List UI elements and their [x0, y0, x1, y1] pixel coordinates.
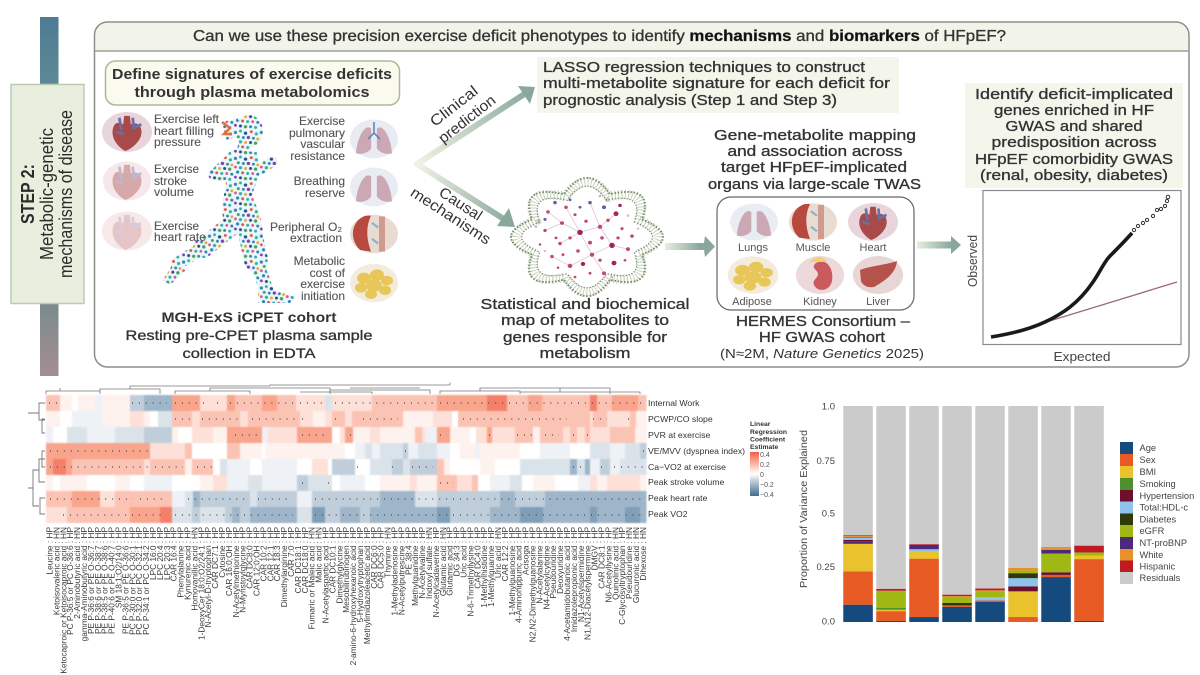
- text block: identify genes: genes enriched in HF: [994, 103, 1154, 119]
- heatmap column labels: N-6-Trimethyllysine : HP: [465, 527, 475, 617]
- heatmap column dendrogram: [46, 382, 640, 394]
- heatmap column labels: CAR 16:4 : HP: [169, 527, 179, 581]
- heatmap column labels: N-Acetylvaline : HP: [417, 527, 427, 598]
- heatmap column labels: CAR DC18:0 : HP: [300, 527, 310, 593]
- heatmap column labels: PE P-36:5 or PE O-36:6 : HP: [120, 527, 130, 634]
- text: gene-metabolite mapping: target HFpEF-implicated: [721, 160, 907, 176]
- heatmap column labels: LPC 20:4 : HP: [155, 527, 165, 580]
- left deficit labels: pressure: [154, 135, 201, 149]
- bar chart legend: [1120, 442, 1194, 584]
- heatmap column labels: CAR DC18:1 : HP: [293, 527, 303, 593]
- cohort caption: collection in EDTA: [182, 345, 316, 361]
- heatmap column labels: CAR DC10:1 : HP: [327, 527, 337, 593]
- step label panel: STEP 2:: [18, 164, 38, 224]
- heatmap column labels: N2,N2-Dimethylguanosine : HP: [528, 527, 538, 642]
- bar chart: y axis ticks: [816, 402, 835, 628]
- heatmap column labels: Leucine : HP: [44, 527, 54, 575]
- icon: heart stroke volume: [103, 162, 151, 200]
- heatmap colour legend: −0.2: [760, 482, 774, 489]
- QQ plot: Observed: [965, 235, 980, 287]
- heatmap row labels: Peak VO2: [648, 509, 688, 519]
- heatmap column labels: Homovanillic acid : HN: [189, 527, 199, 610]
- panel: target organs: Liver: [866, 296, 890, 308]
- heatmap column labels: Thymine : HN: [383, 527, 393, 578]
- icon: heart filling pressure: [102, 112, 152, 152]
- text: gene-metabolite mapping: organs via large-scale TWAS: [708, 177, 921, 193]
- heatmap column labels: 5-Hydroxytryptophan : HP: [355, 527, 365, 622]
- right deficit labels: resistance: [290, 149, 345, 163]
- heatmap column labels: C-Glycosyltryptophan : HP: [617, 527, 627, 625]
- heatmap column labels: CAR DC8:1 : HP: [596, 527, 606, 589]
- panel: target organs: Kidney: [803, 296, 837, 308]
- panel: target organs: Heart: [860, 242, 886, 254]
- heatmap column labels: Pseudouridine : HP: [548, 527, 558, 598]
- metabolite gene network: [511, 178, 663, 296]
- heatmap column labels: CAR DC5:0 : HP: [376, 527, 386, 589]
- bar chart legend: Hispanic: [1140, 562, 1176, 572]
- text block: identify genes: Identify deficit-implicated: [975, 87, 1173, 103]
- heatmap column labels: N6-Acetyllysine : HP: [603, 527, 613, 603]
- left deficit labels: Exercise left: [154, 112, 220, 126]
- stacked bar chart: [843, 406, 1104, 622]
- heatmap column labels: PC P-36:5 or PC O-36:6 : HP: [65, 527, 75, 635]
- heatmap column labels: Quinolinic acid : HN: [610, 527, 620, 600]
- heatmap column labels: CAR 12:1 : HP: [265, 527, 275, 581]
- heatmap column labels: CAR 18:3 : HP: [272, 527, 282, 581]
- heatmap column labels: CAR DC7:1 : HP: [210, 527, 220, 589]
- heatmap column labels: Kynurenic acid : HP: [182, 527, 192, 600]
- heatmap column labels: SM 18:1;O2/14:0 : HP: [114, 527, 124, 608]
- left deficit labels: stroke: [154, 174, 187, 188]
- heatmap column labels: 2-Aminobutyric acid : HN: [72, 527, 82, 619]
- LASSO text block: LASSO regression techniques to construct: [543, 60, 865, 76]
- callout: define signatures: through plasma metabolomics: [134, 85, 370, 101]
- LASSO text block: multi-metabolite signature for each deficit for: [543, 76, 890, 92]
- bar chart legend: Smoking: [1140, 479, 1176, 489]
- LASSO text block: [537, 57, 899, 113]
- heatmap column labels: PE P-38:5 or PE O-38:6 : HP: [100, 527, 110, 634]
- heatmap column labels: Glutamic acid : HP: [445, 527, 455, 596]
- heatmap column labels: 2-amino-6-hydroxyhexanoic acid : HP: [348, 527, 358, 665]
- heatmap column labels: N-Myristoylglycine : HP: [238, 527, 248, 613]
- heatmap row labels: [648, 398, 745, 519]
- heatmap column labels: DG 34:3 : HP: [452, 527, 462, 576]
- bar chart legend: Hypertension: [1140, 491, 1194, 501]
- heatmap row labels: Ca−VO2 at exercise: [648, 462, 726, 472]
- heatmap column labels: Dihexose : HN: [638, 527, 648, 580]
- heatmap column labels: N4-Acetylcytidine : HP: [541, 527, 551, 610]
- left deficit labels: Exercise: [154, 219, 199, 233]
- heatmap column labels: DMGV : HP: [590, 527, 600, 570]
- callout: define signatures: [106, 61, 400, 105]
- heatmap column labels: N-Acetylmethionine : HP: [231, 527, 241, 617]
- heatmap column labels: Mesobilirubinogen : HP: [341, 527, 351, 613]
- heatmap column labels: LPC 16:0 : HP: [148, 527, 158, 580]
- text block: identify genes: [965, 83, 1183, 188]
- heatmap row labels: VE/MVV (dyspnea index): [648, 446, 745, 456]
- left deficit labels: [154, 112, 220, 244]
- text: HERMES consortium: (N≈2M, Nature Genetics 2025): [720, 346, 924, 361]
- arrow: causal mechanisms: [417, 164, 515, 227]
- heatmap column labels: CAR DC4:0 : HP: [472, 527, 482, 589]
- text: statistical map: metabolism: [540, 346, 630, 362]
- heatmap row dendrogram: [28, 403, 45, 514]
- bar chart legend: Diabetes: [1140, 514, 1177, 524]
- bar chart: y axis ticks: 1.0: [822, 402, 835, 412]
- heatmap column labels: Fumaric or Maleic acid : HN: [307, 527, 317, 629]
- heatmap column labels: PC P-30:0 or PC O-30:1 : HP: [127, 527, 137, 635]
- text: statistical map: genes responsible for: [503, 330, 667, 346]
- heatmap column labels: Imidazolepropionic acid : HP: [569, 527, 579, 632]
- text: gene-metabolite mapping: and association across: [728, 144, 902, 160]
- right deficit labels: Breathing: [294, 174, 345, 188]
- right deficit labels: exercise: [300, 277, 345, 291]
- heatmap column labels: Methylimidazoleacetic acid : HP: [362, 527, 372, 644]
- bar chart: y axis ticks: 0.75: [816, 456, 835, 467]
- cohort caption: [126, 309, 373, 361]
- heatmap column labels: Malic acid : HN: [314, 527, 324, 583]
- heatmap column labels: N-Acetylcadaverine : HP: [431, 527, 441, 617]
- panel: target organs: [717, 197, 914, 310]
- right deficit labels: [270, 114, 346, 303]
- heatmap column labels: PE P-40:6 or PE O-40:7 : HP: [107, 527, 117, 634]
- cohort caption: Resting pre-CPET plasma sample: [126, 327, 373, 343]
- arrow: network to organs: [665, 236, 715, 257]
- heatmap column labels: N1-Acetylspermidine : HP: [576, 527, 586, 622]
- text block: identify genes: GWAS and shared: [1006, 119, 1142, 135]
- panel: target organs: Adipose: [732, 296, 772, 308]
- right deficit labels: Exercise: [299, 114, 345, 128]
- text: HERMES consortium: HERMES Consortium –: [736, 314, 911, 330]
- heatmap column labels: PC P-34:1 or PC O-34:2 : HP: [141, 527, 151, 635]
- label: clinical prediction: Clinical: [427, 83, 482, 130]
- heatmap column labels: 1-Methylguanine : HP: [486, 527, 496, 607]
- heatmap column labels: N1,N12-Diacetylspermine : HP: [583, 527, 593, 640]
- left deficit labels: volume: [154, 185, 194, 199]
- right deficit labels: initiation: [301, 289, 345, 303]
- text: statistical map: Statistical and biochemical: [480, 297, 690, 313]
- panel: target organs: Muscle: [796, 242, 830, 254]
- heatmap colour legend: −0.4: [760, 492, 774, 499]
- heatmap colour legend: 0.2: [760, 462, 770, 469]
- main panel: [94, 22, 1189, 367]
- bar chart: y axis ticks: 0.0: [822, 616, 835, 628]
- text: statistical map: [480, 297, 690, 362]
- bar chart: y axis ticks: 0.5: [822, 508, 835, 520]
- heatmap column labels: PE 38:4 : HP: [403, 527, 413, 575]
- text: statistical map: map of metabolites to: [501, 313, 669, 329]
- right deficit labels: vascular: [300, 137, 345, 151]
- heatmap column labels: LPC 20:3 : HP: [162, 527, 172, 580]
- heatmap column labels: 1-DeoxyCer 18:0;O2/24:1 : HP: [196, 527, 206, 640]
- bar chart: y axis title: Proportion of Variance Explained: [798, 430, 810, 588]
- heatmap column labels: PE P-36:6 or PE O-36:7 : HP: [86, 527, 96, 634]
- bar chart: y axis ticks: 0.25: [816, 562, 835, 573]
- right deficit labels: extraction: [290, 231, 342, 245]
- heatmap column labels: [44, 527, 648, 674]
- icon: adipose metabolic cost: [350, 264, 398, 302]
- right deficit labels: Peripheral O₂: [270, 220, 342, 234]
- heatmap column labels: N-Acetylalanine : HP: [534, 527, 544, 604]
- bar chart legend: NT-proBNP: [1140, 538, 1187, 548]
- label: causal mechanisms: mechanisms: [407, 184, 494, 248]
- bar chart legend: eGFR: [1140, 526, 1165, 536]
- heatmap column labels: Pseudouridine : HN: [624, 527, 634, 599]
- heatmap column labels: Acisoga : HP: [521, 527, 531, 575]
- right deficit labels: pulmonary: [289, 126, 345, 140]
- heatmap column labels: 1-Methylguanosine : HP: [507, 527, 517, 616]
- step label panel: mechanisms of disease: [56, 110, 76, 278]
- heatmap colour legend: Regression: [750, 429, 787, 436]
- QQ plot: Expected: [1054, 349, 1110, 364]
- bar chart legend: White: [1140, 550, 1163, 560]
- heatmap column labels: Ketocaproic or Ketoisocaproic acid : HN: [58, 527, 68, 674]
- bar chart legend: Sex: [1140, 455, 1156, 465]
- left deficit labels: Exercise: [154, 162, 199, 176]
- text: gene-metabolite mapping: [708, 128, 921, 193]
- heatmap column labels: gamma-Aminobutyric acid : HP: [79, 527, 89, 641]
- heatmap colour legend: 0.4: [760, 452, 770, 459]
- text: gene-metabolite mapping: Gene-metabolite mapping: [714, 128, 916, 144]
- heatmap column labels: N-Acetylputrescine : HP: [396, 527, 406, 615]
- text: HERMES consortium: HF GWAS cohort: [759, 330, 885, 346]
- LASSO text block: prognostic analysis (Step 1 and Step 3): [543, 93, 837, 109]
- heatmap column labels: CAR 16:0;OH : HP: [224, 527, 234, 596]
- heatmap column labels: Deoxyuridine : HP: [555, 527, 565, 594]
- right deficit labels: Metabolic: [294, 254, 345, 268]
- heatmap column labels: 4-Aminohippuric acid : HP: [514, 527, 524, 623]
- heatmap column labels: CAR 10:2 : HP: [258, 527, 268, 581]
- heatmap column labels: N-Acetylaspartic acid : HP: [320, 527, 330, 623]
- callout: define signatures: Define signatures of exercise deficits: [112, 67, 392, 83]
- heatmap row labels: Peak stroke volume: [648, 477, 724, 487]
- heatmap column labels: Uric acid : HP: [458, 527, 468, 578]
- label: clinical prediction: prediction: [435, 92, 499, 147]
- cohort caption: MGH-ExS iCPET cohort: [162, 309, 337, 325]
- heatmap column labels: Phenylalanine : HP: [176, 527, 186, 598]
- heatmap column labels: 1-Methyladenosine : HP: [390, 527, 400, 616]
- icon: heart rate: [102, 212, 152, 250]
- heatmap colour legend: Coefficient: [750, 436, 786, 444]
- arrow: organs to GWAS: [917, 236, 961, 254]
- main question heading: Can we use these precision exercise deficit phenotypes to identify mechanisms and biomarkers of HFpEF?: [193, 28, 1006, 45]
- heatmap column labels: CAR DC6:0 : HP: [369, 527, 379, 589]
- text block: identify genes: HFpEF comorbidity GWAS: [975, 152, 1173, 168]
- panel: target organs: Lungs: [738, 242, 768, 254]
- left deficit labels: heart filling: [154, 124, 214, 138]
- heatmap colour legend: 0: [760, 472, 764, 479]
- right deficit labels: reserve: [305, 186, 345, 200]
- heatmap significance markers: [49, 403, 644, 515]
- vertical step bar: [40, 17, 58, 376]
- bar chart legend: Total:HDL-c: [1140, 502, 1188, 512]
- icon: breathing reserve lungs: [350, 168, 398, 206]
- text: HERMES consortium: [720, 314, 924, 361]
- heatmap column labels: Cytosine : HP: [217, 527, 227, 578]
- runner silhouette filled with metabolite dots: [163, 115, 295, 303]
- icon: pulmonary lungs: [350, 120, 398, 158]
- text block: identify genes: (renal, obesity, diabetes): [980, 168, 1168, 184]
- heatmap column labels: Dimethylglycine : HP: [334, 527, 344, 604]
- heatmap column labels: Methylguanidine : HP: [410, 527, 420, 606]
- heatmap row labels: Peak heart rate: [648, 493, 708, 503]
- label: causal mechanisms: Causal: [436, 184, 485, 224]
- QQ plot: [965, 190, 1181, 364]
- heatmap column labels: Uric acid : HN: [493, 527, 503, 578]
- heatmap column labels: PE P-38:6 or PE O-38:7 : HP: [93, 527, 103, 634]
- heatmap column labels: CAR 7:0 : HP: [286, 527, 296, 577]
- heatmap column labels: Glucuronic acid : HN: [631, 527, 641, 603]
- right deficit labels: cost of: [310, 266, 346, 280]
- heatmap cells: [46, 395, 1200, 523]
- step label panel: Metabolic-genetic: [37, 128, 57, 260]
- heatmap column labels: Dimethylarginine : HP: [279, 527, 289, 607]
- arrow: clinical prediction: [417, 86, 535, 164]
- heatmap column labels: Indoxyl sulfate : HN: [424, 527, 434, 599]
- heatmap colour legend: Estimate: [750, 444, 779, 451]
- heatmap row labels: PVR at exercise: [648, 430, 710, 440]
- text block: identify genes: predisposition across: [992, 135, 1156, 151]
- heatmap column labels: CAR 12:0;OH : HP: [252, 527, 262, 596]
- icon: oxygen extraction muscle: [350, 215, 398, 253]
- left deficit labels: heart rate: [154, 230, 206, 244]
- heatmap column labels: Ketoisovaleric acid : HN: [51, 527, 61, 615]
- bar chart legend: Age: [1140, 443, 1156, 453]
- heatmap column labels: Glutamic acid : HN: [438, 527, 448, 596]
- step label panel: [11, 84, 84, 304]
- bar chart legend: BMI: [1140, 467, 1156, 477]
- heatmap column labels: CAR DC8:0 : HP: [245, 527, 255, 589]
- heatmap column labels: PC P-32:0 or PC O-32:1 : HP: [134, 527, 144, 635]
- heatmap column labels: N-Acetyl-D-tryptophan : HP: [203, 527, 213, 628]
- heatmap row labels: PCWP/CO slope: [648, 414, 713, 424]
- heatmap column labels: CAR 12:2 : HP: [500, 527, 510, 581]
- heatmap column labels: 1-Methylhistidine : HP: [479, 527, 489, 608]
- bar chart legend: Residuals: [1140, 573, 1181, 583]
- heatmap colour legend: [750, 421, 787, 499]
- heatmap colour legend: Linear: [750, 421, 771, 428]
- heatmap row labels: Internal Work: [648, 398, 700, 408]
- heatmap column labels: 4-Acetamidobutanoic acid : HP: [562, 527, 572, 641]
